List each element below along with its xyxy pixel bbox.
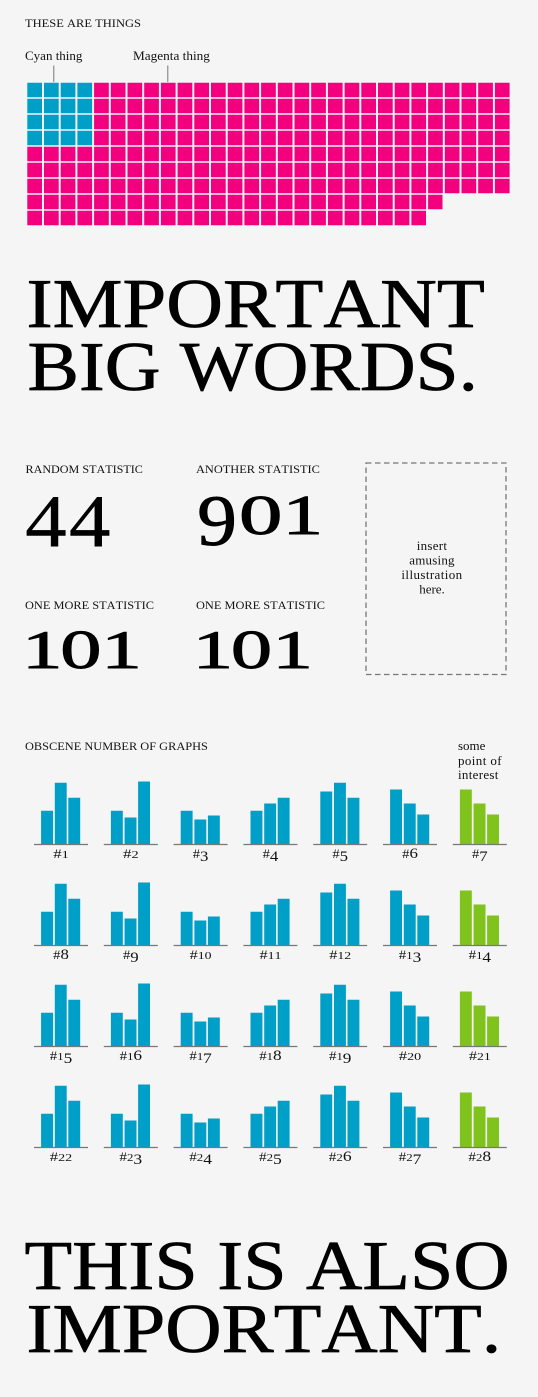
- statistic: one more statistic 101: 1: [22, 620, 63, 680]
- heading: obscene number of graphs: OBSCENE NUMBER OF GRAPHS: [25, 739, 208, 753]
- statistic: another statistic 901: 9: [197, 482, 237, 561]
- label: magenta thing: [133, 48, 210, 82]
- annotation: some point of interest: point of: [458, 753, 502, 768]
- big headline: important big words: BIG WORDS.: [28, 327, 478, 405]
- graph #13: #1: [399, 949, 413, 963]
- label: cyan thing: Cyan thing: [25, 48, 83, 63]
- graph #21: [453, 992, 507, 1063]
- statistic: random statistic 44: 4: [25, 480, 67, 562]
- waffle chart: cyan and magenta squares: [27, 90, 510, 218]
- graph #9: [104, 882, 158, 966]
- statistic: one more statistic 101: 0: [60, 620, 101, 681]
- statistic: one more statistic 101 second: ONE MORE STATISTIC: [196, 598, 325, 612]
- graph #14: [453, 890, 507, 966]
- graph #26: #26: [329, 1147, 352, 1164]
- statistic: one more statistic 101: 1: [101, 620, 142, 680]
- graph #20: #20: [399, 1049, 421, 1063]
- graph #6: #6: [402, 846, 418, 862]
- statistic: another statistic 901: [196, 462, 323, 561]
- statistic: another statistic 901: 1: [282, 485, 323, 547]
- big headline: this is also important: IMPORTANT.: [26, 1291, 501, 1368]
- graph #8: #8: [53, 947, 69, 963]
- graph #1: #1: [53, 847, 69, 861]
- statistic: another statistic 901: ANOTHER STATISTIC: [196, 462, 320, 476]
- statistic: one more statistic 101: [22, 598, 154, 681]
- graph #20: [383, 992, 437, 1063]
- graph #21: #21: [469, 1049, 491, 1063]
- graph #9: #: [123, 947, 130, 962]
- statistic: one more statistic 101 second: 0: [231, 620, 272, 681]
- illustration placeholder: dashed box: amusing: [409, 552, 455, 568]
- graph #24: [174, 1114, 228, 1167]
- graph #3: [174, 811, 228, 865]
- graph #13: [383, 890, 437, 966]
- statistic: one more statistic 101 second: 1: [272, 620, 313, 680]
- graph #7: #: [472, 846, 479, 861]
- annotation: some point of interest: [458, 738, 502, 782]
- graph #5: #: [332, 846, 340, 861]
- graph #1: [34, 783, 88, 861]
- illustration placeholder: dashed box: illustration: [401, 567, 463, 582]
- graph #14: #1: [469, 949, 482, 963]
- graph #18: #18: [259, 1048, 282, 1064]
- graph #28: [453, 1092, 507, 1164]
- graph #5: [313, 783, 367, 865]
- graph #19: [313, 985, 367, 1067]
- graph #3: #: [193, 846, 200, 861]
- graph #12: #12: [329, 948, 351, 962]
- big headline: important big words: [26, 266, 485, 405]
- statistic: random statistic 44: [25, 462, 143, 562]
- graph #15: #1: [50, 1050, 64, 1064]
- illustration placeholder: dashed box: insert: [417, 538, 447, 553]
- graph #17: 7: [203, 1051, 212, 1067]
- graph #14: 4: [482, 950, 491, 966]
- graph #7: [453, 790, 507, 865]
- illustration placeholder: dashed box: [366, 463, 506, 674]
- graph #4: #: [263, 846, 270, 861]
- label: cyan thing: [25, 48, 83, 82]
- graph #19: 9: [343, 1051, 351, 1067]
- annotation: some point of interest: interest: [458, 767, 499, 782]
- graph #16: #16: [120, 1048, 142, 1064]
- illustration placeholder: dashed box: here.: [419, 582, 445, 596]
- graph #24: #2: [189, 1150, 203, 1164]
- statistic: random statistic 44: RANDOM STATISTIC: [26, 462, 143, 476]
- graph #16: [104, 984, 158, 1064]
- annotation: some point of interest: some: [458, 738, 486, 753]
- graph #5: 5: [340, 849, 348, 865]
- graph #25: #2: [259, 1150, 273, 1164]
- graph #23: 3: [133, 1150, 142, 1167]
- statistic: one more statistic 101 second: [193, 598, 325, 681]
- graph #23: [104, 1084, 158, 1167]
- graph #17: #1: [189, 1050, 203, 1064]
- big headline: this is also important: [24, 1228, 510, 1368]
- statistic: one more statistic 101 second: 1: [193, 620, 233, 680]
- label: magenta thing: Magenta thing: [133, 48, 210, 63]
- graph #15: 5: [64, 1051, 72, 1067]
- statistic: random statistic 44: 4: [69, 480, 110, 562]
- graph #19: #1: [329, 1050, 343, 1064]
- graph #27: 7: [413, 1150, 421, 1167]
- statistic: one more statistic 101: ONE MORE STATISTIC: [25, 598, 154, 612]
- magenta squares: [27, 90, 510, 218]
- graph #4: 4: [270, 849, 278, 865]
- graph #18: [243, 1000, 297, 1064]
- graph #13: 3: [413, 950, 421, 966]
- graph #4: [243, 798, 297, 865]
- graph #22: #22: [50, 1150, 72, 1164]
- graph #9: 9: [130, 950, 139, 966]
- graph #28: #28: [468, 1147, 491, 1164]
- big headline: important big words: IMPORTANT: [26, 266, 485, 343]
- graph #24: 4: [203, 1150, 212, 1167]
- graph #7: 7: [479, 849, 488, 865]
- graph #8: [34, 884, 88, 963]
- graph #15: [34, 985, 88, 1067]
- graph #25: 5: [273, 1150, 282, 1167]
- graph #26: [313, 1086, 367, 1164]
- graph #25: [243, 1101, 297, 1167]
- big headline: this is also important: THIS IS ALSO: [24, 1228, 510, 1305]
- graph #10: [174, 912, 228, 962]
- graph #11: [243, 899, 297, 962]
- graph #6: [383, 790, 437, 862]
- graph #10: #10: [190, 948, 212, 962]
- graph #23: #2: [119, 1150, 133, 1164]
- graph #11: #11: [259, 948, 281, 962]
- graph #3: 3: [200, 849, 208, 865]
- graph #27: [383, 1092, 437, 1167]
- statistic: another statistic 901: 0: [239, 484, 282, 546]
- heading: these are things: THESE ARE THINGS: [25, 16, 141, 30]
- graph #2: [104, 782, 158, 861]
- graph #12: [313, 884, 367, 962]
- cyan squares: [27, 90, 94, 138]
- graph #22: [34, 1086, 88, 1164]
- graph #27: #2: [399, 1150, 413, 1164]
- graph #17: [174, 1013, 228, 1067]
- graph #2: #2: [123, 847, 139, 861]
